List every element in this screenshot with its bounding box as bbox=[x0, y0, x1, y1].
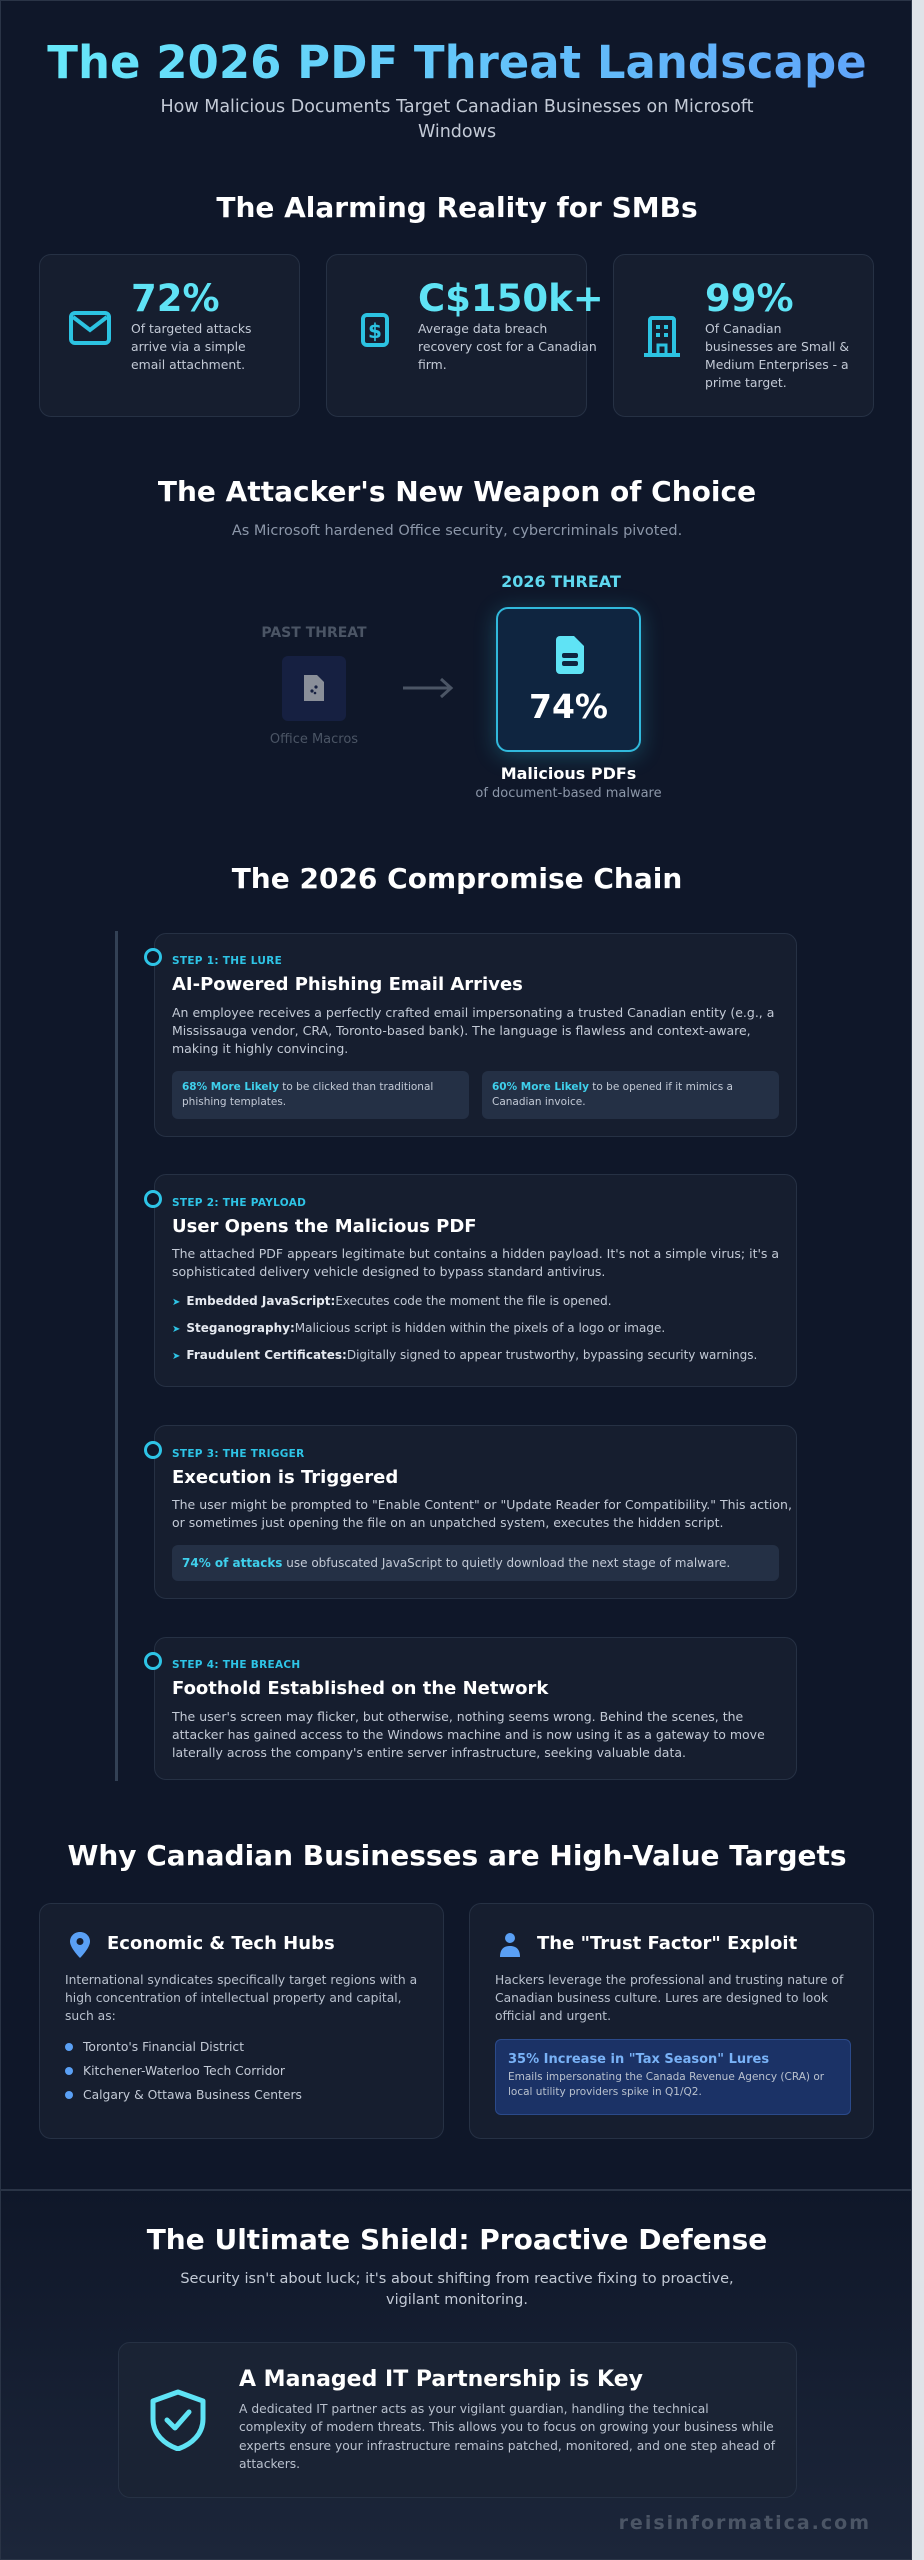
callout: tax season bbox=[495, 2039, 851, 2115]
heading: alarming reality: The Alarming Reality for SMBs bbox=[216, 191, 698, 224]
stat description: Of Canadian bbox=[705, 321, 782, 336]
bullet list bbox=[172, 1294, 757, 1362]
footer brand: reisinformatica.com bbox=[619, 2512, 871, 2534]
callout: tax season: Emails impersonating the Canada Revenue Agency (CRA) or local utility providers spike in Q1/Q2. bbox=[508, 2071, 824, 2098]
hub list: Kitchener-Waterloo Tech Corridor bbox=[83, 2064, 285, 2078]
step 1 card: AI-Powered Phishing Email Arrives bbox=[172, 974, 523, 995]
bullet list: ➤ Fraudulent Certificates:Digitally signed to appear trustworthy, bypassing security warnings. bbox=[172, 1348, 757, 1362]
stat box: 74% of attacks: 74% of attacks use obfuscated JavaScript to quietly download the next stage of malware. bbox=[182, 1556, 730, 1570]
stat description: email attachment. bbox=[131, 357, 245, 372]
step 1 card: An employee receives a perfectly crafted email impersonating a trusted Canadian entity (e.g., a Mississauga vendor, CRA, Toronto-based bank). The language is flawless and context-aware, making it highly convincing. bbox=[172, 1005, 774, 1056]
stat description bbox=[418, 321, 597, 372]
stat description: businesses are Small & bbox=[705, 339, 849, 354]
bullet list: ➤ Embedded JavaScript:Executes code the moment the file is opened. bbox=[172, 1294, 612, 1308]
step 3 card: STEP 3: THE TRIGGER bbox=[172, 1448, 305, 1460]
stat description: prime target. bbox=[705, 375, 787, 390]
stat: 74%: 74% bbox=[529, 687, 608, 726]
stat description: Medium Enterprises - a bbox=[705, 357, 849, 372]
stat card: C$150k+ bbox=[326, 254, 587, 417]
callout: tax season: 35% Increase in "Tax Season" Lures bbox=[508, 2052, 769, 2067]
stat number: 72% bbox=[131, 277, 220, 320]
stat box: 68%: 68% More Likely to be clicked than traditional phishing templates. bbox=[182, 1081, 433, 1108]
step 4 card bbox=[154, 1637, 797, 1780]
arrow bbox=[403, 678, 453, 698]
panel: trust factor bbox=[469, 1903, 874, 2139]
past threat: Office Macros bbox=[270, 732, 358, 747]
past threat bbox=[261, 625, 367, 747]
card body: Hackers leverage the professional and trusting nature of Canadian business culture. Lures are designed to look official and urgent. bbox=[495, 1973, 843, 2023]
icon: shield bbox=[150, 2390, 206, 2451]
2026 threat box bbox=[496, 607, 641, 752]
icon: office macros bbox=[282, 656, 346, 721]
malicious PDFs caption: of document-based malware bbox=[475, 786, 662, 801]
step 4 card: The user's screen may flicker, but otherwise, nothing seems wrong. Behind the scenes, the attacker has gained access to the Windows machine and is now using it as a gateway to move laterally across the company's entire server infrastructure, seeking valuable data. bbox=[172, 1709, 765, 1760]
stat description: Average data breach bbox=[418, 321, 547, 336]
stat box: 60% bbox=[482, 1071, 779, 1119]
stat number: C$150k+ bbox=[418, 277, 604, 320]
panel title: A Managed IT Partnership is Key bbox=[239, 2367, 643, 2392]
malicious PDFs caption: Malicious PDFs bbox=[501, 764, 636, 783]
past threat: PAST THREAT bbox=[261, 625, 367, 641]
icon: money bbox=[361, 313, 389, 347]
2026 threat label: 2026 THREAT bbox=[501, 572, 621, 591]
section subtitle: Security isn't about luck; it's about shifting from reactive fixing to proactive, vigilant monitoring. bbox=[180, 2271, 734, 2308]
heading: ultimate shield: The Ultimate Shield: Proactive Defense bbox=[147, 2223, 767, 2256]
step 2 card: The attached PDF appears legitimate but contains a hidden payload. It's not a simple virus; it's a sophisticated delivery vehicle designed to bypass standard antivirus. bbox=[172, 1246, 779, 1279]
bullet list: ➤ Steganography:Malicious script is hidden within the pixels of a logo or image. bbox=[172, 1321, 665, 1335]
stat description: recovery cost for a Canadian bbox=[418, 339, 597, 354]
stat description: arrive via a simple bbox=[131, 339, 246, 354]
section subtitle: As Microsoft hardened Office security, cybercriminals pivoted. bbox=[232, 523, 682, 539]
step 3 card bbox=[154, 1425, 797, 1599]
stat description: firm. bbox=[418, 357, 447, 372]
heading: weapon of choice: The Attacker's New Weapon of Choice bbox=[158, 475, 756, 508]
heading: canadian businesses: Why Canadian Businesses are High-Value Targets bbox=[67, 1839, 847, 1872]
icon: building bbox=[644, 316, 680, 357]
card body: International syndicates specifically target regions with a high concentration of intellectual property and capital, such as: bbox=[65, 1973, 417, 2023]
stat card: 99% bbox=[613, 254, 874, 417]
step 3 card: Execution is Triggered bbox=[172, 1467, 398, 1488]
hub list: Calgary & Ottawa Business Centers bbox=[83, 2088, 302, 2102]
step 1 card: STEP 1: THE LURE bbox=[172, 955, 282, 967]
card title: The "Trust Factor" Exploit bbox=[537, 1933, 797, 1954]
stat box: 68% bbox=[172, 1071, 469, 1119]
panel: managed IT partnership bbox=[118, 2342, 797, 2498]
malicious PDFs caption bbox=[475, 764, 662, 801]
panel body: A dedicated IT partner acts as your vigilant guardian, handling the technical complexity of modern threats. This allows you to focus on growing your business while experts ensure your infrastructure remains patched, monitored, and one step ahead of attackers. bbox=[239, 2402, 775, 2471]
stat description bbox=[705, 321, 849, 390]
step 2 card: STEP 2: THE PAYLOAD bbox=[172, 1197, 306, 1209]
stat box: 60%: 60% More Likely to be opened if it mimics a Canadian invoice. bbox=[492, 1081, 733, 1108]
stat number: 99% bbox=[705, 277, 794, 320]
icon: money: $ bbox=[368, 319, 382, 343]
subtitle: How Malicious Documents Target Canadian Businesses on Microsoft Windows bbox=[160, 97, 754, 142]
title: The 2026 PDF Threat Landscape bbox=[47, 36, 867, 89]
step 2 card: User Opens the Malicious PDF bbox=[172, 1216, 477, 1237]
icon: envelope bbox=[69, 311, 111, 345]
icon: map pin bbox=[70, 1932, 90, 1958]
stat card: 72% bbox=[39, 254, 300, 417]
step 3 card: The user might be prompted to "Enable Content" or "Update Reader for Compatibility." This action, or sometimes just opening the file on an unpatched system, executes the hidden script. bbox=[172, 1497, 792, 1530]
timeline line bbox=[115, 931, 118, 1781]
stat description bbox=[131, 321, 252, 372]
heading: compromise chain: The 2026 Compromise Chain bbox=[232, 862, 682, 895]
step 4 card: STEP 4: THE BREACH bbox=[172, 1659, 300, 1671]
step 2 card bbox=[154, 1174, 797, 1387]
step 4 card: Foothold Established on the Network bbox=[172, 1678, 548, 1699]
bottom section background bbox=[1, 2189, 913, 2560]
panel: economic & tech hubs bbox=[39, 1903, 444, 2139]
stat box: 74% of attacks bbox=[172, 1545, 779, 1581]
stat description: Of targeted attacks bbox=[131, 321, 252, 336]
icon: person bbox=[500, 1933, 520, 1957]
icon: pdf document bbox=[556, 636, 584, 674]
hub list: Toronto's Financial District bbox=[83, 2040, 244, 2054]
hub list bbox=[65, 2040, 302, 2102]
step 1 card bbox=[154, 933, 797, 1137]
card title: Economic & Tech Hubs bbox=[107, 1933, 335, 1954]
